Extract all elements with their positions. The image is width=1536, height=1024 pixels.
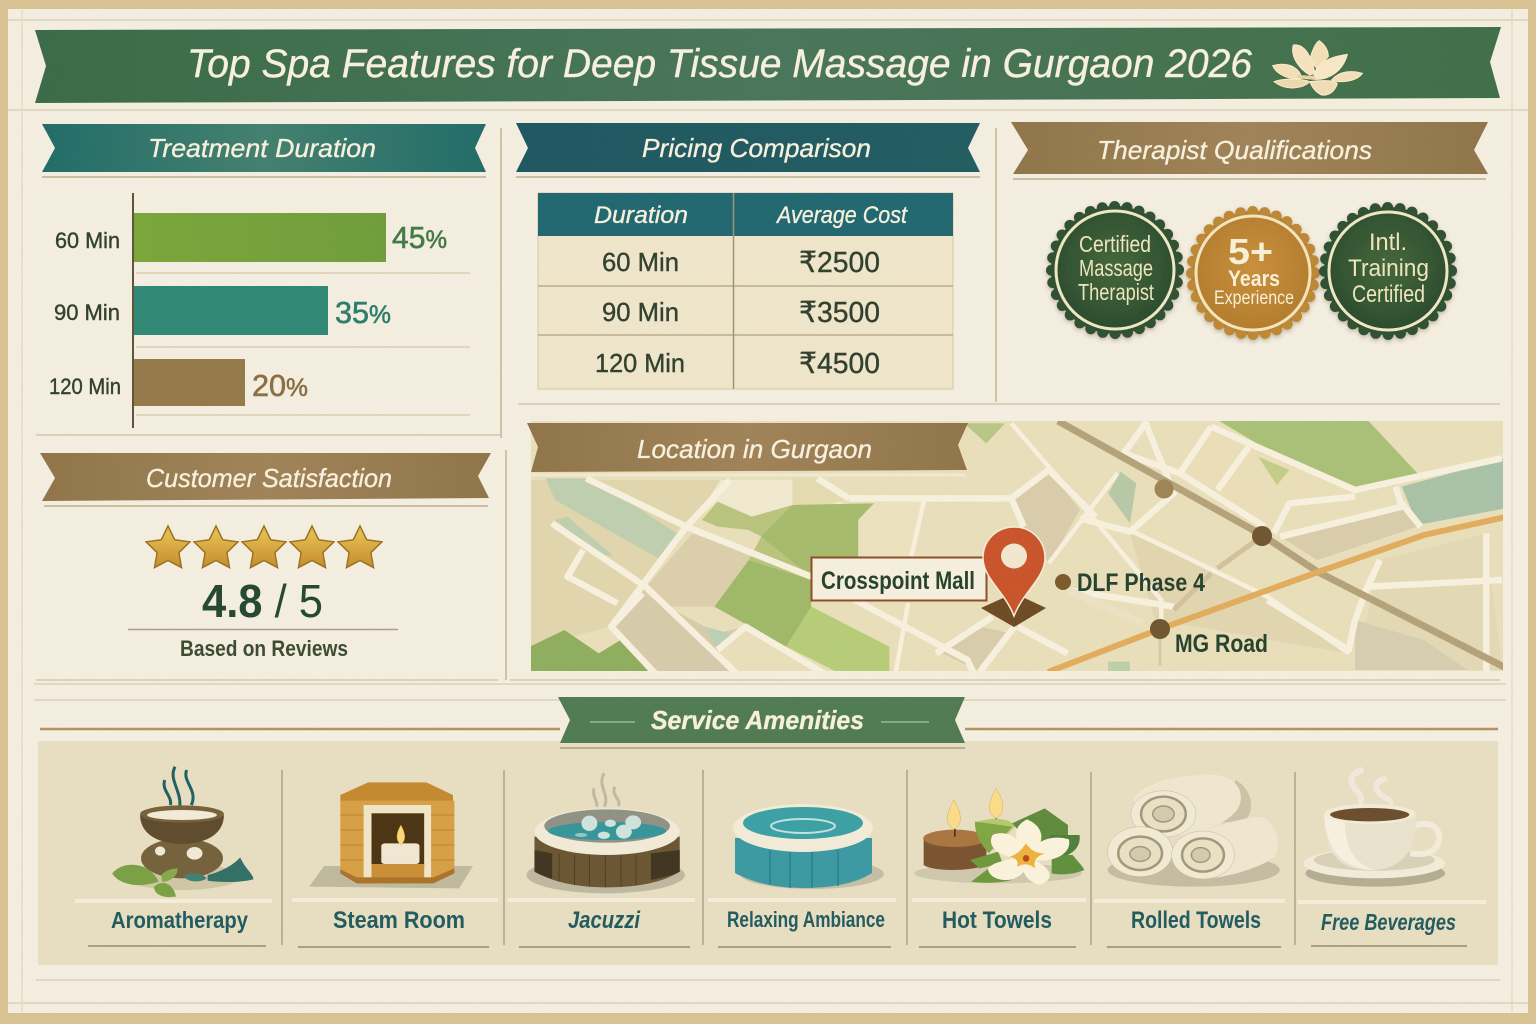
amenity: rolled towels [1108,775,1280,934]
amenity: jacuzzi [527,773,685,934]
icon: brick hearth [309,782,473,888]
heading: pricing comparison [516,123,980,177]
badge: intl. training certified: Intl. [1369,229,1407,256]
icon: lotus flower [1273,41,1362,95]
heading: customer satisfaction: Customer Satisfaction [146,463,392,493]
pricing table: ₹2500 [799,247,880,279]
pricing table: Average Cost [775,202,908,229]
heading: treatment duration: Treatment Duration [148,133,376,163]
label: rolled towels: Rolled Towels [1131,907,1261,934]
map [530,420,1510,673]
marker: upper junction [1154,480,1174,498]
panel: customer satisfaction [40,453,491,661]
bar chart: 120 Min [49,374,121,399]
title banner [35,27,1501,103]
label: steam room: Steam Room [333,907,465,934]
pricing table: 60 Min [602,247,679,277]
heading: therapist qualifications: Therapist Qualifications [1097,135,1372,165]
panel: pricing comparison [516,123,980,389]
icon: oil burner [112,767,253,897]
badge: intl. training certified: Training [1348,255,1429,282]
rating note: Based on Reviews [180,636,348,661]
heading: therapist qualifications [1011,122,1488,179]
heading: treatment duration [42,124,486,177]
bar chart: 20% [252,368,308,403]
icon: hot tub [527,773,685,893]
label: relaxing ambiance: Relaxing Ambiance [727,907,885,932]
bar chart: 35% [335,295,391,330]
icon: coffee cup [1304,770,1445,887]
label: dlf phase 4: DLF Phase 4 [1077,569,1205,597]
icon: rolled towels [1108,775,1280,887]
panel: location map [527,420,1510,673]
pricing table: 120 Min [595,348,685,378]
badge: certified massage therapist: Therapist [1078,279,1154,305]
heading: location in gurgaon [527,423,968,475]
marker: middle junction [1252,526,1272,546]
icon: candles and flower [914,788,1084,885]
amenity: steam room [309,782,473,934]
badge: 5+ years experience [1191,211,1315,335]
heading: service amenities [558,697,965,748]
badge: intl. training certified [1324,207,1452,335]
pricing table: ₹4500 [799,348,880,380]
badge: 5+ years experience: Experience [1214,288,1294,309]
label: free beverages: Free Beverages [1321,909,1456,935]
bar chart: 60 Min [55,228,120,253]
amenity: free beverages [1304,770,1456,935]
badge: 5+ years experience: Years [1228,266,1280,291]
badge: certified massage therapist: Massage [1079,255,1153,281]
bar chart: 90 Min [54,300,120,325]
bar chart: 45% [392,220,447,255]
amenity: hot towels [914,788,1084,934]
amenity: relaxing ambiance [727,804,885,932]
label: aromatherapy: Aromatherapy [111,907,248,933]
label: jacuzzi: Jacuzzi [568,907,641,934]
icon: location pin [981,527,1046,627]
badge: 5+ years experience: 5+ [1228,231,1273,272]
heading: customer satisfaction [40,453,491,506]
panel: service amenities [38,697,1498,965]
pricing table: 90 Min [602,297,679,327]
callout: crosspoint mall: Crosspoint Mall [821,567,975,595]
amenity: aromatherapy [111,767,253,933]
badge: certified massage therapist: Certified [1079,231,1151,257]
label: mg road [1150,619,1268,658]
title: Top Spa Features for Deep Tissue Massage in Gurgaon 2026 [187,42,1253,86]
five stars [146,526,382,568]
panel: therapist qualifications [1011,122,1488,335]
bar chart [49,193,470,428]
callout: crosspoint mall [812,558,986,600]
pricing table: Duration [594,202,688,229]
pricing table [538,193,953,389]
panel: treatment duration [42,124,486,428]
pricing table: ₹3500 [799,297,880,329]
badge: intl. training certified: Certified [1352,281,1425,308]
heading: location in gurgaon: Location in Gurgaon [637,434,872,464]
label: hot towels: Hot Towels [942,907,1052,934]
heading: service amenities: Service Amenities [651,705,864,735]
badge: certified massage therapist [1051,206,1179,334]
label: mg road: MG Road [1175,630,1268,658]
rating: 4.8 / 5 [202,575,323,627]
heading: pricing comparison: Pricing Comparison [642,133,871,163]
icon: soaking tub [733,804,884,889]
